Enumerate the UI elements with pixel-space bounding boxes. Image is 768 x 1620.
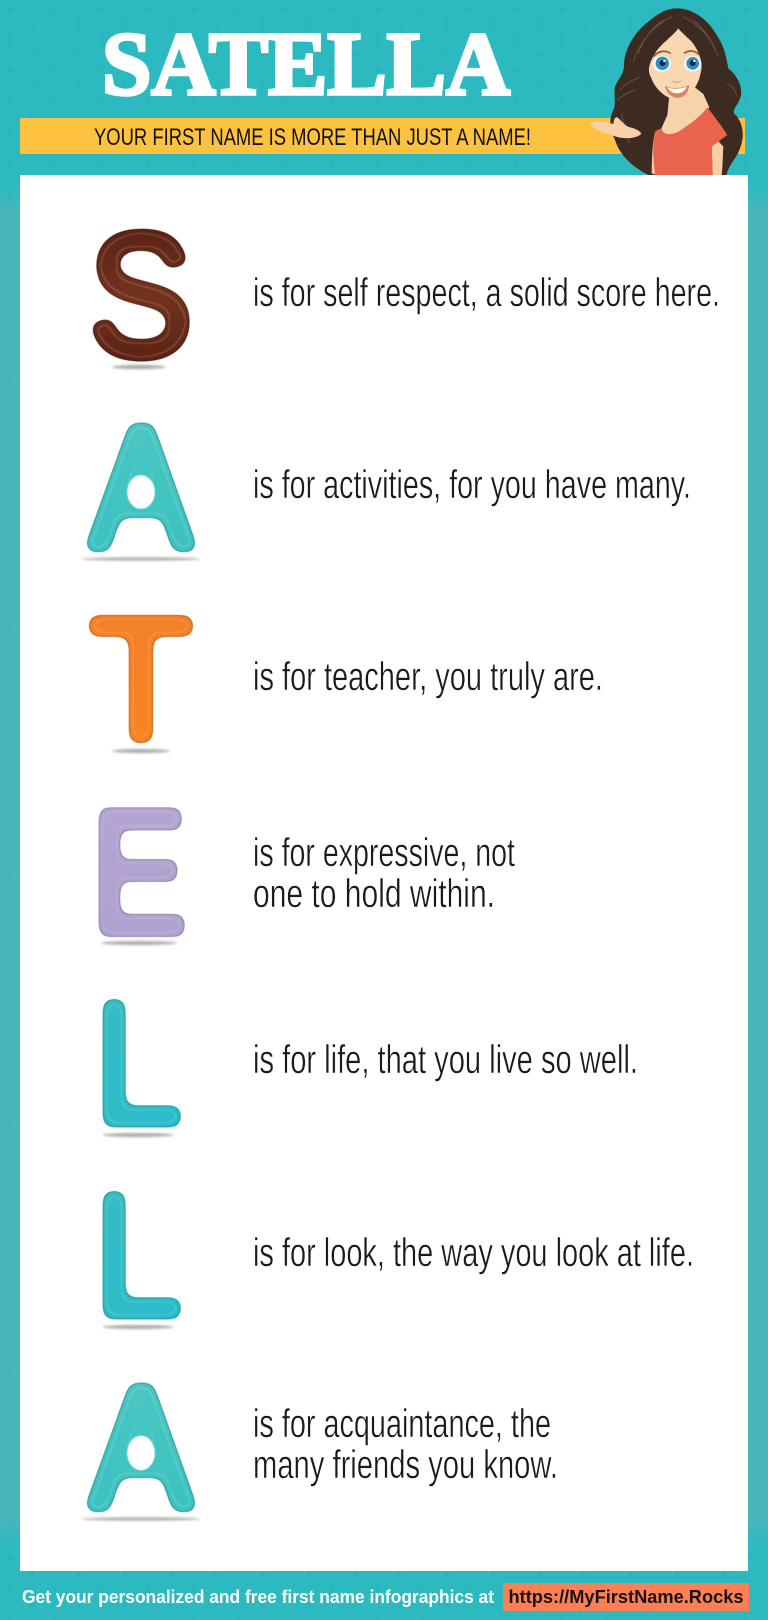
letter L: L: [93, 967, 183, 1160]
letter S: S: [88, 198, 193, 393]
letter A second: A: [91, 1353, 192, 1543]
banner tagline: YOUR FIRST NAME IS MORE THAN JUST A NAME!: [94, 124, 531, 151]
letter A: A: [91, 393, 192, 583]
text: A second: is for acquaintance, the: [253, 1402, 551, 1446]
row E: [91, 774, 515, 969]
row L second: [93, 1159, 694, 1352]
title: SATELLA: [102, 15, 510, 114]
text: A second: many friends you know.: [253, 1443, 558, 1487]
row A: [81, 393, 691, 583]
row L: [93, 967, 638, 1160]
text: A second: [253, 1402, 558, 1487]
row T: [89, 581, 603, 776]
row S: [88, 198, 720, 393]
illustration: smiling woman with open hand: [590, 8, 743, 175]
footer url badge: https://MyFirstName.Rocks: [508, 1586, 744, 1607]
text: L: is for life, that you live so well.: [253, 1038, 638, 1082]
text: E: is for expressive, not: [253, 831, 515, 875]
letter L second: L: [93, 1159, 183, 1352]
row A second: [81, 1353, 558, 1543]
text: E: one to hold within.: [253, 872, 495, 916]
text: T: is for teacher, you truly are.: [253, 655, 603, 699]
letter E: E: [91, 774, 187, 969]
footer call to action: Get your personalized and free first name infographics at: [22, 1586, 494, 1607]
yellow banner: [20, 118, 745, 154]
letter T: T: [89, 581, 193, 776]
text: E: [253, 831, 515, 916]
